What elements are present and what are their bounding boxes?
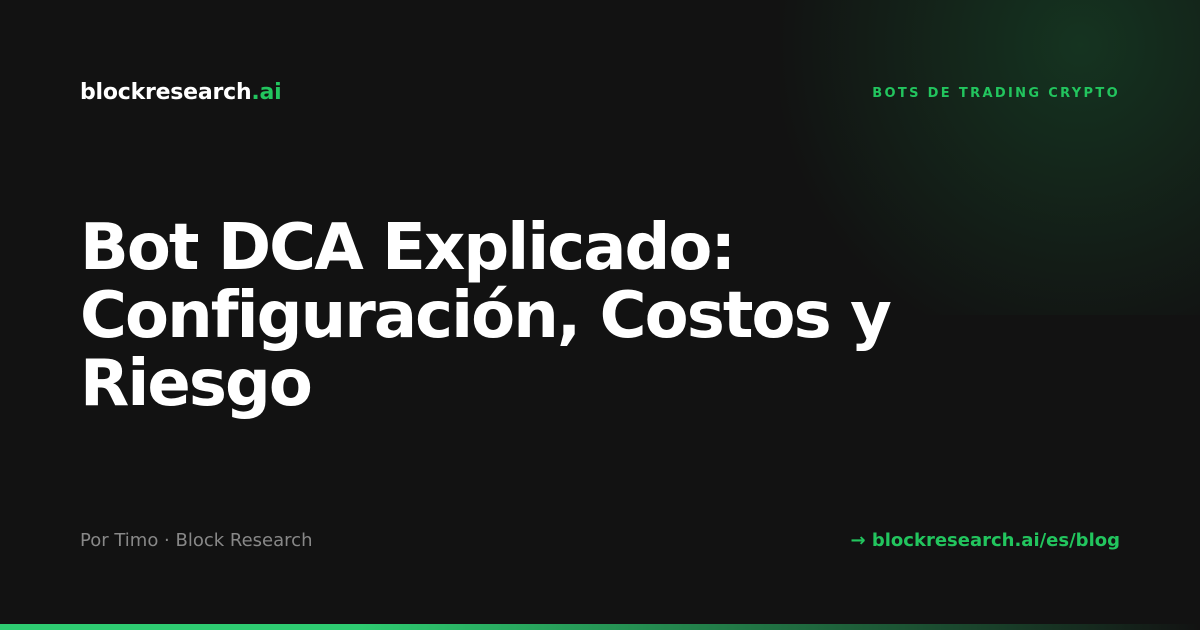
background glow: [780, 0, 1200, 315]
bottom accent bar: [0, 624, 1200, 630]
title: Riesgo: [80, 347, 311, 421]
title: [80, 211, 891, 421]
category tag: BOTS DE TRADING CRYPTO: [872, 86, 1120, 101]
title: Configuración, Costos y: [80, 279, 890, 353]
blog link: → blockresearch.ai/es/blog: [851, 530, 1120, 551]
title: Bot DCA Explicado:: [80, 211, 734, 285]
brand logo: blockresearch.ai: [80, 80, 282, 105]
author byline: Por Timo · Block Research: [80, 530, 312, 551]
